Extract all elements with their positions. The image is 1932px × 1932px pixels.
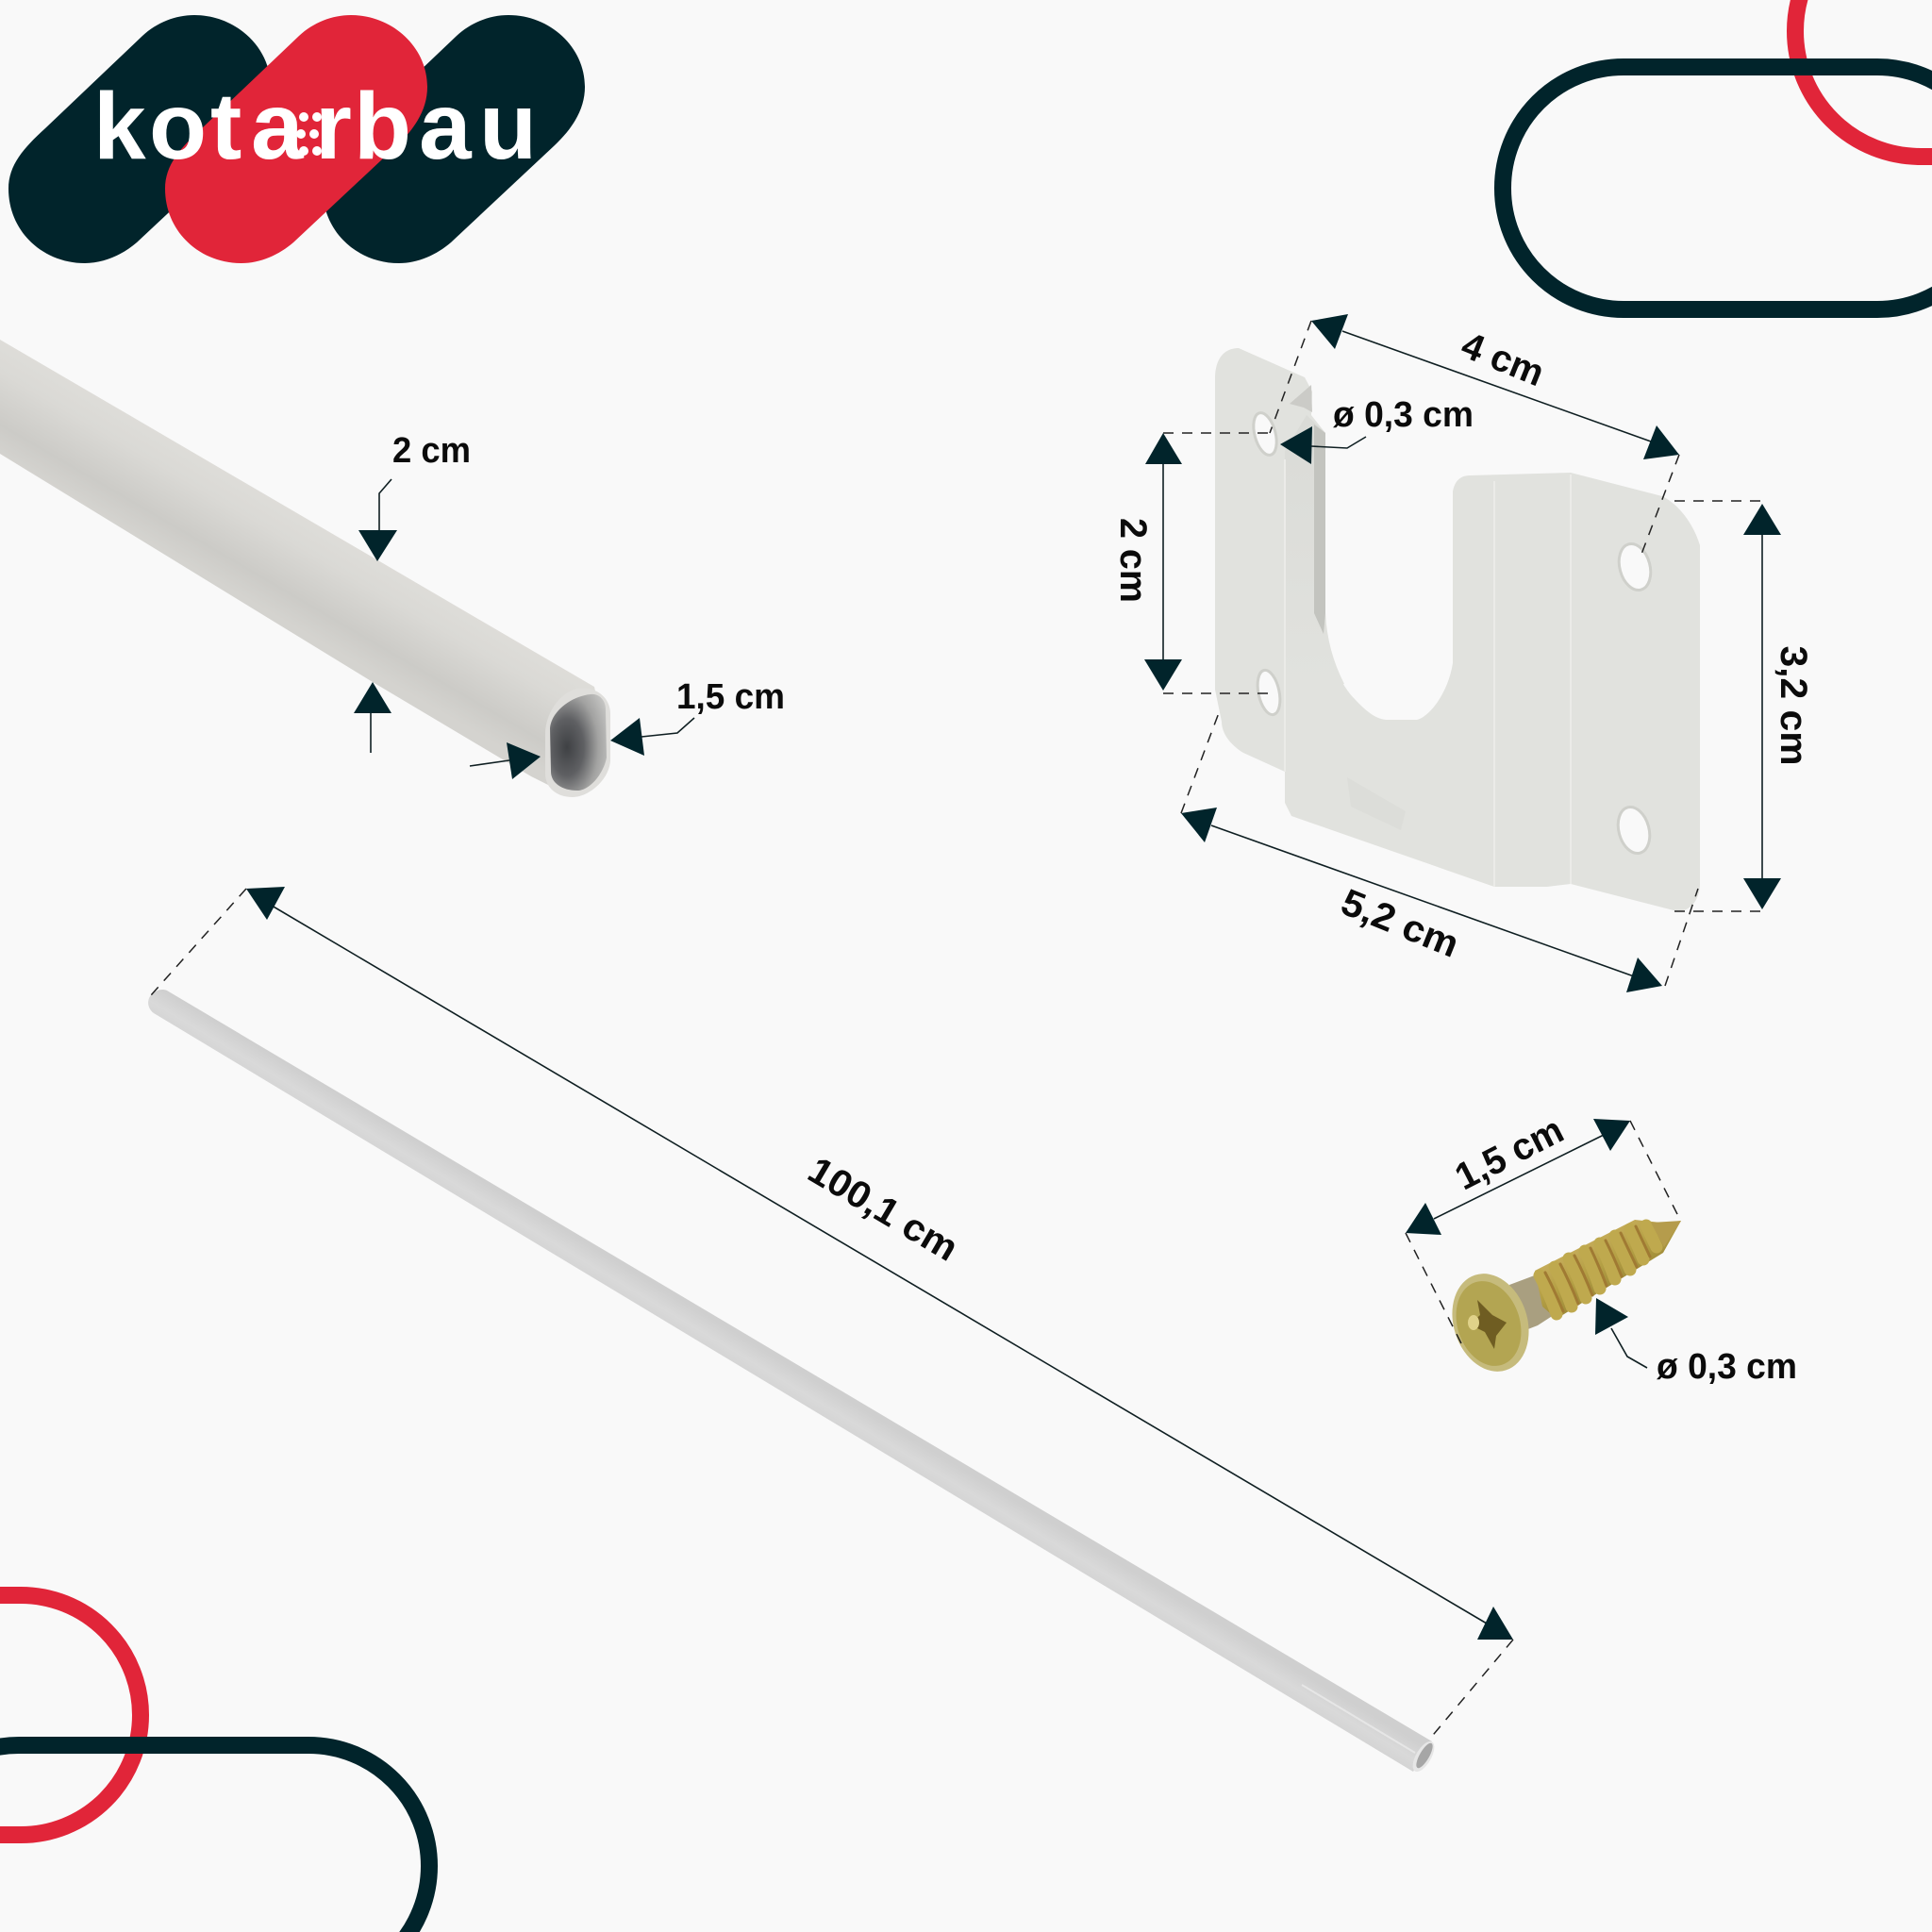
logo: kotarbau	[8, 15, 585, 263]
dimension: bracket 2 cm	[1112, 433, 1274, 693]
screw	[1441, 1220, 1681, 1381]
tube highlight	[1302, 1685, 1415, 1753]
dimension: screw 1,5 cm: 1,5 cm	[1449, 1109, 1570, 1198]
dimension: pipe 1,5 cm: 1,5 cm	[676, 677, 785, 717]
dimension: bracket 3,2 cm: 3,2 cm	[1773, 645, 1814, 766]
pipe body	[0, 340, 610, 797]
dimension: pipe 1,5 cm	[470, 677, 785, 779]
screw head	[1441, 1264, 1541, 1381]
logo capsules	[8, 15, 271, 263]
dimension: bracket 5,2 cm	[1181, 710, 1698, 992]
screw neck	[1509, 1274, 1557, 1332]
logo gear teeth	[296, 112, 322, 156]
bracket emboss	[1347, 777, 1406, 830]
dimension: bracket hole 0,3 cm	[1280, 395, 1474, 464]
screw thread shadows	[1545, 1226, 1650, 1311]
large pipe close-up	[0, 340, 610, 797]
logo wordmark: kotarbau	[93, 74, 537, 179]
dimension: tube 100,1 cm	[151, 887, 1513, 1740]
pipe end rim	[545, 689, 610, 797]
bracket top fold shadow	[1290, 385, 1312, 412]
dimension: bracket 5,2 cm: 5,2 cm	[1335, 881, 1465, 966]
dimension: pipe 2 cm: 2 cm	[392, 431, 471, 471]
long tube	[148, 990, 1439, 1775]
bracket holes	[1249, 410, 1656, 857]
bracket edge shade	[1314, 425, 1325, 634]
screw threaded shank	[1535, 1220, 1681, 1319]
decoration: top right capsule outlines	[1503, 0, 1932, 309]
bracket body	[1215, 348, 1700, 911]
dimension: bracket 3,2 cm	[1674, 501, 1814, 911]
decoration: bottom left capsule outlines	[0, 1595, 429, 1932]
screw drive recess	[1470, 1300, 1507, 1349]
bracket inner flange	[1285, 415, 1344, 684]
dimension: screw 0,3 cm	[1595, 1298, 1797, 1387]
dimension: bracket 4 cm	[1270, 314, 1679, 557]
dimension: bracket hole 0,3 cm: ø 0,3 cm	[1333, 395, 1474, 435]
bracket	[1215, 348, 1700, 911]
screw tip	[1651, 1221, 1681, 1247]
bracket fold lines	[1285, 459, 1571, 887]
dimension: bracket 2 cm: 2 cm	[1112, 518, 1154, 603]
dimension: pipe 2 cm	[354, 431, 471, 753]
dimension: screw 1,5 cm	[1406, 1109, 1681, 1349]
tube body	[148, 990, 1432, 1772]
dimension: bracket 4 cm: 4 cm	[1456, 325, 1550, 394]
dimension: screw 0,3 cm: ø 0,3 cm	[1657, 1347, 1797, 1387]
pipe opening	[550, 694, 607, 791]
dimension: tube 100,1 cm: 100,1 cm	[801, 1149, 965, 1270]
tube end	[1408, 1738, 1439, 1775]
screw threads	[1540, 1225, 1657, 1314]
